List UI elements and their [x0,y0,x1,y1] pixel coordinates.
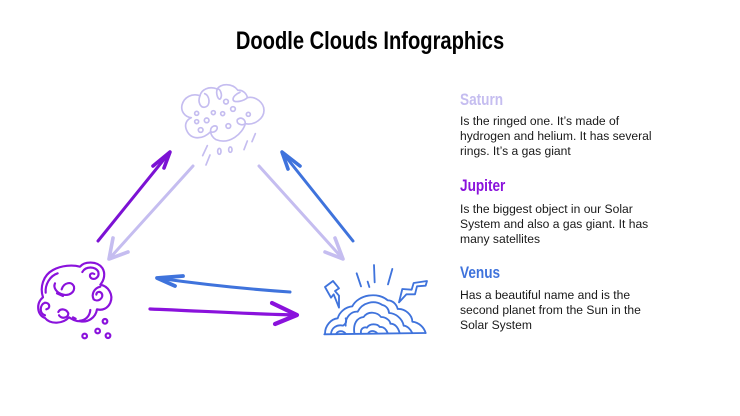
heading: Jupiter: Jupiter [460,176,505,195]
body: Saturn [460,114,652,158]
icon: swirl cloud [38,263,111,338]
text block: Saturn [460,90,652,158]
icon: rain cloud [182,85,264,165]
arrow: lilac down-left [109,166,193,259]
body: Venus [460,288,641,332]
arrow: purple right [150,303,297,324]
icon: thunder cloud [324,265,427,334]
text block: Venus [460,263,641,332]
arrow: purple up-right [98,152,170,241]
body: Saturn: hydrogen and helium. It has several [460,129,652,143]
text block: Jupiter [460,176,648,246]
body: Venus: Has a beautiful name and is the [460,288,630,302]
body: Jupiter: System and also a gas giant. It has [460,217,648,231]
arrow: blue left [157,276,290,292]
body: Saturn: rings. It’s a gas giant [460,144,571,158]
body: Saturn: Is the ringed one. It’s made of [460,114,619,128]
title: Doodle Clouds Infographics [236,27,504,55]
body: Jupiter [460,202,648,246]
heading: Venus: Venus [460,263,500,282]
body: Jupiter: many satellites [460,232,540,246]
body: Jupiter: Is the biggest object in our Solar [460,202,633,216]
heading: Saturn: Saturn [460,90,503,109]
arrow: lilac down-right [259,166,343,259]
body: Venus: Solar System [460,318,532,332]
body: Venus: second planet from the Sun in the [460,303,641,317]
arrow: blue up-left [282,152,353,241]
